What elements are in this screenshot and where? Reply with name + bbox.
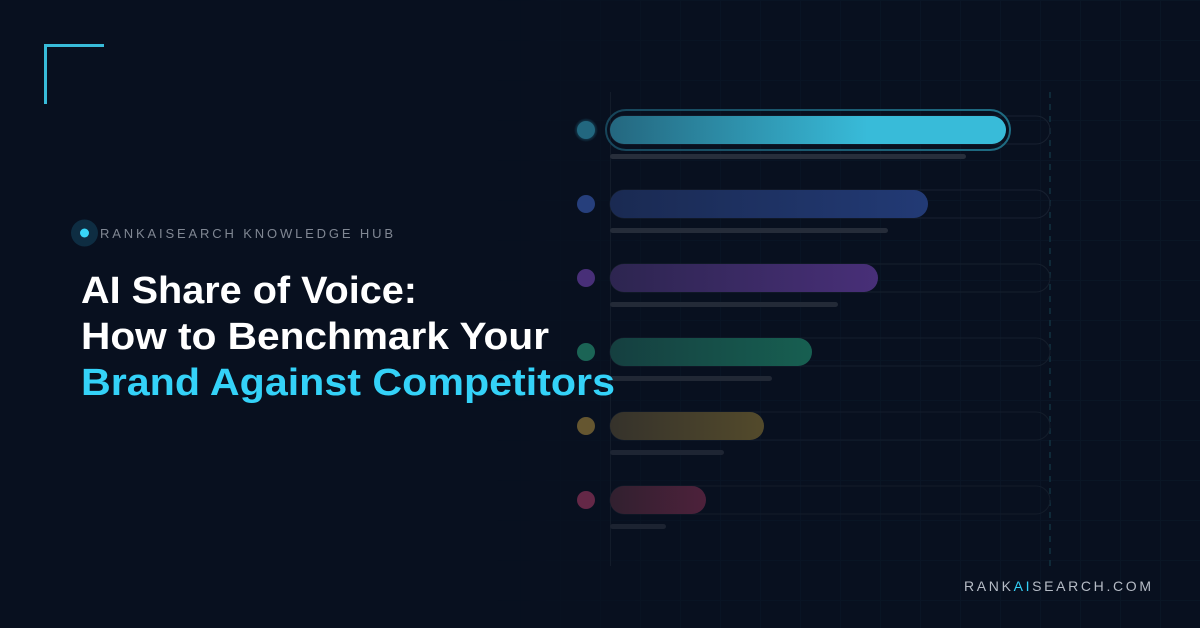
icon: pulsing dot — [71, 220, 98, 246]
title: AI Share of Voice: — [81, 270, 417, 312]
chart: share of voice bars — [574, 92, 1050, 566]
bar row 5 — [577, 412, 1050, 455]
chart axis — [610, 92, 612, 566]
bar row 2 — [577, 190, 1050, 233]
title: Brand Against Competitors — [81, 362, 615, 404]
bar row 3 — [577, 264, 1050, 307]
bar row 6 — [577, 486, 1050, 529]
benchmark dashed line — [1049, 92, 1051, 566]
eyebrow: knowledge hub label — [71, 220, 393, 246]
bar row 1 — [574, 110, 1050, 159]
eyebrow text: RANKAISEARCH KNOWLEDGE HUB — [100, 226, 393, 241]
title — [81, 270, 615, 404]
title: How to Benchmark Your — [81, 316, 549, 358]
footer: site name: RANKAISEARCH.COM — [964, 578, 1151, 594]
bar row 4 — [577, 338, 1050, 381]
corner bracket — [44, 44, 104, 104]
